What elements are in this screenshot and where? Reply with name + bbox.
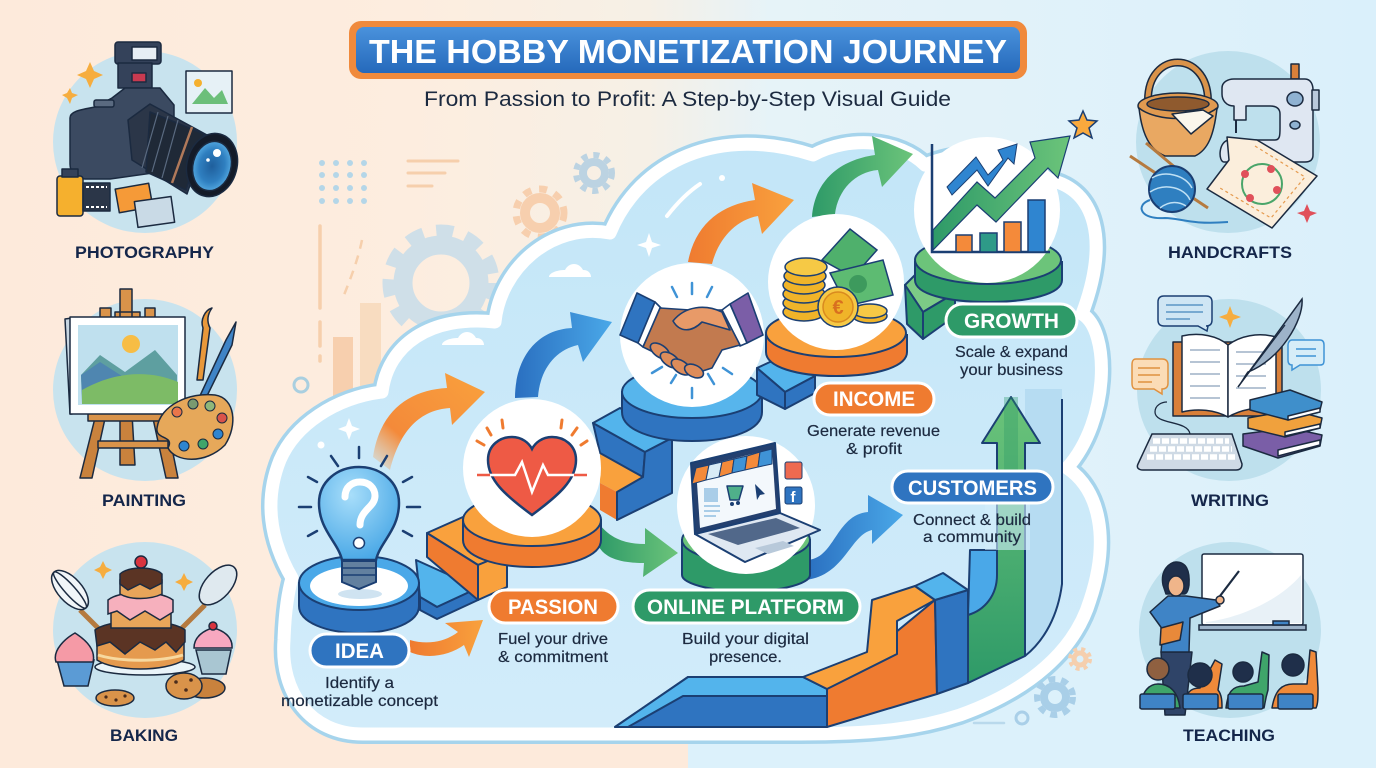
step 3: blue stairs (593, 408, 672, 520)
growth staircase at the bottom (615, 389, 1062, 727)
green growth arrow (968, 397, 1040, 683)
label: online platform: Build your digital (682, 631, 809, 648)
title banner: THE HOBBY MONETIZATION JOURNEY (369, 33, 1007, 70)
icon: camera (57, 42, 244, 227)
icon: three tier cake (95, 556, 195, 675)
step 2: passion platform and heart (463, 399, 601, 567)
label: online platform: ONLINE PLATFORM (647, 596, 844, 619)
label: idea: monetizable concept (281, 693, 439, 710)
arrow: online platform to customers (806, 495, 903, 580)
euro symbol: € (832, 297, 844, 319)
label: PHOTOGRAPHY (75, 243, 215, 262)
icon: yarn and needles (1130, 143, 1228, 223)
icon: teacher (1150, 562, 1224, 715)
icon: embroidered fabric (1207, 137, 1317, 228)
icon: whiteboard (1199, 554, 1306, 630)
panel: painting (53, 289, 237, 510)
label: income: & profit (846, 441, 903, 458)
label: online platform: presence. (709, 649, 782, 666)
arrow: passion to online platform (598, 525, 678, 577)
arrow: passion to partnership (515, 312, 612, 398)
decoration: dots, lines and gears behind the cloud (294, 155, 612, 399)
arrow: idea to passion (373, 373, 485, 470)
title banner (349, 21, 1027, 79)
arrow: income to growth (812, 136, 913, 217)
icon: laptop storefront (691, 443, 820, 562)
label: income (807, 383, 940, 458)
label: growth: GROWTH (964, 310, 1059, 333)
icon: keyboard (1137, 402, 1242, 470)
label: idea (281, 634, 439, 710)
label: customers: a community (923, 529, 1021, 546)
step 4: handshake platform (620, 263, 764, 441)
decoration: lower right gears (974, 649, 1090, 724)
label: BAKING (110, 726, 178, 745)
panel: handcrafts (1130, 51, 1320, 262)
step: online platform base and laptop (677, 436, 820, 592)
icon: light bulb with question mark (299, 447, 420, 589)
label: growth: your business (960, 362, 1063, 379)
panel: photography (53, 42, 244, 262)
label: customers: Connect & build (913, 512, 1031, 529)
step 6: growth platform and chart (914, 111, 1097, 302)
icon: heart with pulse line (477, 420, 587, 515)
step 1: idea connector (416, 560, 478, 619)
label: online platform (633, 590, 860, 666)
panel: teaching (1139, 542, 1321, 745)
icon: speech bubbles (1132, 296, 1324, 394)
label: idea: IDEA (335, 640, 384, 663)
orange step (827, 600, 937, 727)
icon: whisks (45, 558, 244, 630)
label: PAINTING (102, 491, 186, 510)
step 5: income platform and money (766, 214, 907, 376)
icon: star (1069, 111, 1097, 138)
icon: students raising hands (1140, 650, 1318, 709)
panel: journey cloud (271, 143, 1101, 743)
label: HANDCRAFTS (1168, 243, 1292, 262)
label: income: Generate revenue (807, 423, 940, 440)
icon: feather quill (1238, 299, 1302, 387)
arrow: partnership to income (688, 183, 794, 264)
icon: stacked books (1243, 390, 1322, 458)
icon: bills and coins (783, 229, 893, 327)
icon: open book (1173, 334, 1282, 417)
label: passion (489, 590, 618, 666)
label: passion: Fuel your drive (498, 631, 608, 648)
label: TEACHING (1183, 726, 1275, 745)
label: income: INCOME (833, 388, 915, 411)
icon: easel and canvas (65, 289, 236, 478)
arrow: idea label to passion label (410, 620, 483, 657)
icon: growth chart (932, 136, 1070, 252)
blue step (935, 590, 968, 694)
subtitle: From Passion to Profit: A Step-by-Step Visual Guide (424, 88, 951, 111)
icon: cupcakes and cookies (55, 622, 232, 706)
label: passion: & commitment (498, 649, 609, 666)
facebook glyph: f (790, 489, 796, 506)
light panel behind the arrow (1025, 389, 1062, 656)
label: idea: Identify a (325, 675, 394, 692)
icon: handshake (620, 293, 763, 381)
step 6: green connector to growth (905, 270, 955, 339)
icon: sewing machine (1220, 64, 1319, 162)
label: customers: CUSTOMERS (908, 477, 1037, 500)
label: passion: PASSION (508, 596, 598, 619)
icon: basket (1138, 62, 1218, 156)
step 1: idea platform and bulb (299, 447, 420, 633)
label: growth (946, 304, 1077, 379)
label: WRITING (1191, 491, 1269, 510)
label: customers (892, 471, 1053, 546)
tint behind community text (985, 503, 1030, 550)
panel: writing (1132, 296, 1324, 510)
panel: baking (45, 542, 244, 745)
step 5: blue connector to income (757, 355, 815, 409)
label: growth: Scale & expand (955, 344, 1068, 361)
step 2: orange stairs (427, 517, 507, 600)
blue wedge (615, 677, 827, 727)
